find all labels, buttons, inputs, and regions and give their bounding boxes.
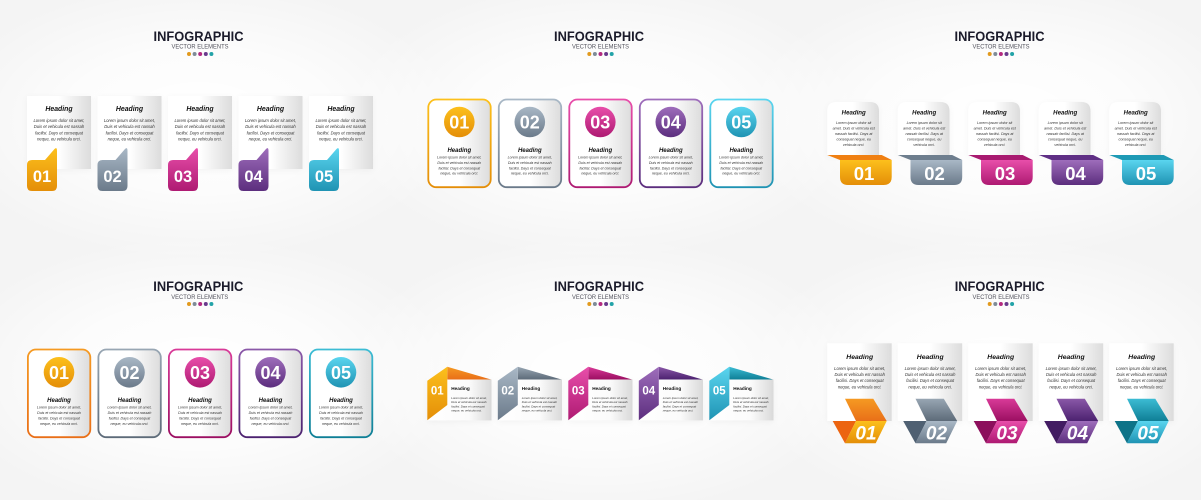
title block: INFOGRAPHIC [154,28,244,44]
card 03 [168,96,232,191]
card 01: 01 [33,168,51,186]
card 01: consequat neque, eu [836,138,871,142]
card 04: Lorem ipsum dolor sit amet, [649,156,693,160]
card 03: Duis et vehicula est nassah [592,400,628,404]
card 01: Lorem ipsum dolor sit amet, [451,396,487,400]
card 05: facilisi. Days et consequat [733,404,767,408]
card 03 [569,100,632,187]
card 03: neque, eu vehicula orci. [592,408,623,412]
card 05: Duis et vehicula est nassah [319,411,363,415]
card 02: Heading [116,106,144,113]
card 03: facilisi. Days et consequat [977,378,1025,383]
card 02: nassah facilisi. Days at [905,132,944,136]
panel: chevron cards [827,278,1174,444]
title block [154,28,244,56]
card 01: Lorem ipsum dolor sit amet, [834,366,885,371]
title block: VECTOR ELEMENTS [171,294,228,301]
card 05: consequat neque, eu [1118,138,1153,142]
card 04: neque, eu vehicula orci. [652,172,690,176]
card 05: Lorem ipsum dolor sit amet, [319,406,363,410]
card 05: Duis et vehicula est nassah [733,400,769,404]
card 05: facilisi. Days et consequat [320,416,363,420]
card 04: 04 [661,113,681,133]
card 02: Duis et vehicula est nassah [104,124,155,129]
card 05: Heading [1128,354,1156,361]
card 01: Heading [45,106,73,113]
card 02: Heading [917,354,944,361]
card 01 [27,96,91,191]
title block [955,278,1045,306]
card 02 [898,343,962,444]
card 05: Duis et vehicula est nassah [316,124,367,129]
card 01: neque, eu vehicula orci. [440,172,478,176]
card 03: Heading [983,109,1007,116]
card 04 [238,96,302,191]
title block [554,278,644,306]
card 03: Duis et vehicula est nassah [578,161,622,165]
card 03 [968,343,1033,444]
card 01: Lorem ipsum dolor sit [836,121,872,125]
card 05: vehicula orci. [1125,143,1146,147]
card 01: Lorem ipsum dolor sit amet, [37,406,81,410]
card 03: Heading [987,354,1015,361]
card 05: amet. Duis et vehicula est [1115,127,1158,131]
card 04: neque, eu vehicula orci. [1049,384,1093,389]
card 02: 02 [103,168,122,186]
card 05: neque, eu vehicula orci. [322,422,360,426]
card 03: facilisi. Days et consequat [179,416,222,420]
card 03 [568,367,632,420]
title block: VECTOR ELEMENTS [972,44,1030,51]
card 03: 03 [590,113,610,133]
card 05 [309,96,373,191]
card 01 [827,343,892,444]
card 02: neque, eu vehicula orci. [908,384,952,389]
card 04: facilisi. Days et consequat [1047,378,1096,383]
card 03 [968,102,1033,185]
panel: tabbed paper cards [27,28,373,191]
card 03: Lorem ipsum dolor sit [977,121,1013,125]
card 02: Heading [118,398,142,404]
title block: INFOGRAPHIC [153,278,243,294]
card 05: Heading [1124,109,1148,116]
card 04: 04 [1065,163,1086,184]
card 03: neque, eu vehicula orci. [581,172,619,176]
card 03: neque, eu vehicula orci. [979,384,1023,389]
card 05 [310,350,372,437]
card 05: 05 [315,168,333,186]
card 04: Lorem ipsum dolor sit amet, [248,406,293,410]
card 03: Heading [188,398,212,404]
card 01: nassah facilisi. Days at [835,132,873,136]
card 03: vehicula orci. [984,143,1005,147]
card 05: nassah facilisi. Days at [1117,132,1155,136]
card 03: 03 [572,386,585,398]
card 02: facilisi. Days et consequat [509,166,552,170]
card 04: 04 [1067,423,1088,444]
card 03: facilisi. Days et consequat [592,404,626,408]
card 03: neque, eu vehicula orci. [181,422,219,426]
card 05: Lorem ipsum dolor sit amet, [315,118,367,123]
card 05: Lorem ipsum dolor sit amet, [1116,366,1167,371]
card 05: facilisi. Days et consequat [721,166,763,170]
card 02: Duis et vehicula est nassah [905,372,956,377]
card 05: 05 [1136,163,1156,184]
card 02: facilisi. Days et consequat [906,378,955,383]
card 01: Duis et vehicula est nassah [37,411,81,415]
card 04 [1039,343,1103,444]
card 02: 02 [926,423,947,444]
card 01: facilisi. Days et consequat [439,166,481,170]
card 03: Lorem ipsum dolor sit amet, [178,406,222,410]
card 04 [640,100,702,187]
card 02: 02 [501,386,514,398]
card 02: vehicula orci. [913,143,935,147]
card 05 [1109,102,1174,185]
card 04: Heading [1053,109,1077,116]
card 03: consequat neque, eu [977,138,1012,142]
card 05: Heading [729,148,753,154]
card 05: Duis et vehicula est nassah [1116,372,1168,377]
card 03: 03 [995,163,1015,184]
card 01: 01 [854,163,874,184]
card 02: facilisi. Days et consequat [522,404,555,408]
card 02: Duis et vehicula est nassah [108,411,151,415]
card 04: Lorem ipsum dolor sit [1048,121,1084,125]
card 02: Lorem ipsum dolor sit [907,121,943,125]
card 03: nassah facilisi. Days at [976,132,1014,136]
title block [554,28,644,56]
card 03: Duis et vehicula est nassah [178,411,222,415]
panel: outlined cards with circles, top row [428,28,773,187]
card 01: Heading [47,398,71,404]
card 02: neque, eu vehicula orci. [108,136,151,141]
card 01: amet. Duis et vehicula est [833,127,876,131]
card 03: neque, eu vehicula orci. [178,136,222,141]
card 03: Duis et vehicula est nassah [175,124,226,129]
card 05: Heading [329,398,353,404]
card 04: 04 [244,168,263,186]
card 02: facilisi. Days et consequat [106,130,154,135]
card 05: 05 [1137,423,1159,444]
card 05 [709,367,774,420]
card 01: neque, eu vehicula orci. [37,136,81,141]
card 01: Lorem ipsum dolor sit amet, [437,156,481,160]
card 01: 01 [431,386,444,398]
card 04: 04 [260,363,281,383]
card 02 [98,96,162,191]
card 04: Lorem ipsum dolor sit amet, [1046,366,1097,371]
card 04: Lorem ipsum dolor sit amet, [663,396,699,400]
card 04: 04 [642,386,656,398]
card 02: Lorem ipsum dolor sit amet, [508,156,552,160]
card 04: neque, eu vehicula orci. [252,422,289,426]
card 05 [1109,343,1174,444]
card 05: facilisi. Days et consequat [317,130,366,135]
title block: INFOGRAPHIC [554,28,644,44]
card 03: Lorem ipsum dolor sit amet, [592,396,628,400]
title block: VECTOR ELEMENTS [572,294,629,301]
card 02: neque, eu vehicula orci. [111,422,148,426]
card 01: neque, eu vehicula orci. [838,384,882,389]
card 02: Heading [912,109,936,116]
card 02: neque, eu vehicula orci. [511,172,549,176]
card 02: Lorem ipsum dolor sit amet, [104,118,155,123]
card 04: facilisi. Days et consequat [250,416,292,420]
card 02: Duis et vehicula est nassah [508,161,552,165]
card 05: neque, eu vehicula orci. [1120,384,1164,389]
card 03: Lorem ipsum dolor sit amet, [975,366,1026,371]
title block: VECTOR ELEMENTS [572,44,629,51]
card 01 [428,100,491,187]
title block: INFOGRAPHIC [955,278,1045,294]
card 04: Lorem ipsum dolor sit amet, [245,118,296,123]
card 03: Duis et vehicula est nassah [975,372,1027,377]
card 04: Heading [257,106,285,113]
card 01 [28,350,90,437]
card 01: Heading [842,109,866,116]
title block [954,28,1044,56]
card 05: Lorem ipsum dolor sit amet, [733,396,769,400]
card 01: facilisi. Days et consequat [38,416,81,420]
card 04: neque, eu vehicula orci. [663,408,694,412]
card 01: Lorem ipsum dolor sit amet, [33,118,85,123]
card 05: Heading [327,106,355,113]
card 02 [98,350,161,437]
card 04: facilisi. Days et consequat [663,404,696,408]
card 03: amet. Duis et vehicula est [974,127,1017,131]
card 02: neque, eu vehicula orci. [522,408,553,412]
title block [153,278,243,306]
card 03: Heading [186,106,214,113]
card 05: facilisi. Days et consequat [1118,378,1166,383]
card 03: facilisi. Days et consequat [176,130,225,135]
card 05: neque, eu vehicula orci. [733,408,764,412]
title block: INFOGRAPHIC [954,28,1044,44]
card 04 [639,367,703,420]
card 05: Lorem ipsum dolor sit [1118,121,1154,125]
panel: outlined cards with circles, bottom row [28,278,372,437]
card 04: Duis et vehicula est nassah [1046,372,1097,377]
card 02 [499,100,561,187]
card 01: neque, eu vehicula orci. [40,422,78,426]
card 04: Heading [663,386,681,391]
card 02 [498,367,562,420]
card 04: facilisi. Days et consequat [650,166,693,170]
card 01: Duis et vehicula est nassah [34,124,85,129]
card 02: Duis et vehicula est nassah [522,400,557,404]
card 04 [239,350,302,437]
card 04: Duis et vehicula est nassah [249,411,292,415]
card 02: Heading [522,386,540,391]
card 04: amet. Duis et vehicula est [1044,127,1087,131]
card 03: Lorem ipsum dolor sit amet, [174,118,226,123]
card 05: Heading [733,386,752,391]
card 01: 01 [49,363,69,383]
card 02: facilisi. Days et consequat [109,416,151,420]
card 05 [710,100,773,187]
card 04: Heading [259,398,283,404]
card 02: amet. Duis et vehicula est [903,127,946,131]
card 04 [1039,102,1103,185]
card 03: Heading [592,386,611,391]
card 05: Duis et vehicula est nassah [719,161,763,165]
card 01: neque, eu vehicula orci. [451,408,482,412]
card 03: 03 [190,363,210,383]
panel: folded ribbon cards [827,28,1174,185]
card 01: vehicula orci. [843,143,864,147]
card 02 [898,102,962,185]
card 01: 01 [449,113,469,133]
card 01: Heading [846,354,874,361]
card 04: facilisi. Days et consequat [247,130,295,135]
card 01: Heading [451,386,470,391]
card 04: Heading [659,148,683,154]
card 03: Heading [588,148,612,154]
card 04: Duis et vehicula est nassah [663,400,698,404]
card 05: neque, eu vehicula orci. [319,136,363,141]
card 04: nassah facilisi. Days at [1046,132,1085,136]
card 01: Duis et vehicula est nassah [834,372,886,377]
title block: VECTOR ELEMENTS [972,294,1030,301]
card 01: 01 [855,423,877,444]
card 05: 05 [713,386,726,398]
card 01: Heading [447,148,471,154]
card 02: 02 [924,163,945,184]
card 04: Duis et vehicula est nassah [245,124,296,129]
card 02: Lorem ipsum dolor sit amet, [522,396,558,400]
card 01 [827,102,892,185]
card 01: facilisi. Days et consequat [35,130,84,135]
card 02: 02 [520,113,540,133]
card 04: Duis et vehicula est nassah [649,161,693,165]
card 04: vehicula orci. [1054,143,1076,147]
card 05: 05 [331,363,351,383]
card 03 [169,350,231,437]
card 02: consequat neque, eu [907,138,941,142]
title block: VECTOR ELEMENTS [172,44,228,51]
card 03: 03 [174,168,192,186]
card 05: neque, eu vehicula orci. [722,172,760,176]
card 02: Lorem ipsum dolor sit amet, [905,366,956,371]
card 01: facilisi. Days et consequat [451,404,485,408]
panel: angled fold cards [427,278,774,420]
card 04: neque, eu vehicula orci. [249,136,292,141]
card 02: 02 [119,363,140,383]
card 04: Heading [1058,354,1085,361]
card 05: 05 [731,113,751,133]
card 02: Heading [518,148,542,154]
card 01: Duis et vehicula est nassah [437,161,481,165]
card 01: facilisi. Days et consequat [836,378,884,383]
card 01 [427,367,492,420]
card 01: Duis et vehicula est nassah [451,400,487,404]
card 03: Lorem ipsum dolor sit amet, [578,156,622,160]
card 03: 03 [996,423,1018,444]
card 04: consequat neque, eu [1048,138,1082,142]
card 02: Lorem ipsum dolor sit amet, [107,406,152,410]
card 05: Lorem ipsum dolor sit amet, [719,156,763,160]
title block: INFOGRAPHIC [554,278,644,294]
card 03: facilisi. Days et consequat [580,166,622,170]
